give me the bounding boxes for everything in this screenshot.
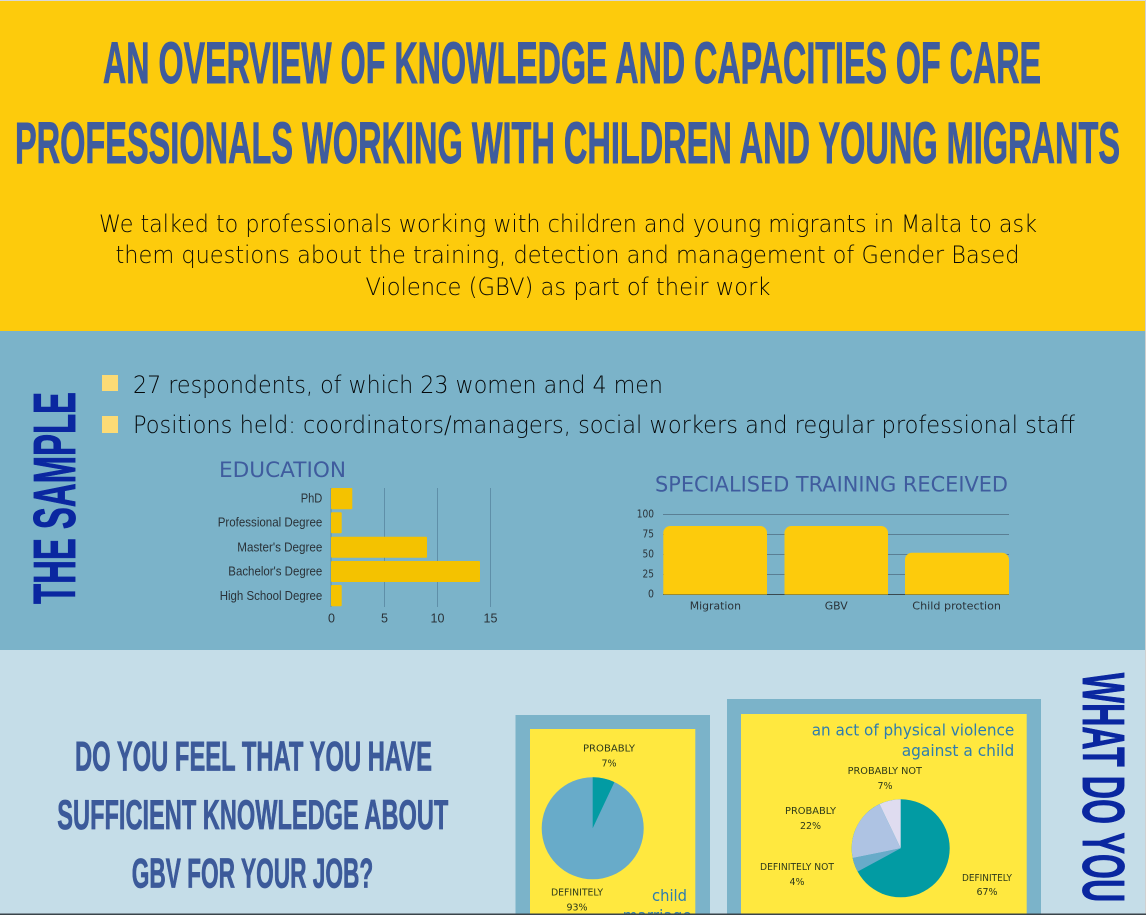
bar chart: education: PhD <box>301 492 322 506</box>
bar chart: specialised training: 100 <box>637 508 654 520</box>
bar chart: specialised training: 75 <box>642 528 654 540</box>
bar chart: specialised training: 50 <box>642 548 654 560</box>
panel: child marriage pie <box>516 715 710 915</box>
panel: physical violence pie: 22% <box>800 821 821 832</box>
bar chart: education: Professional Degree <box>218 516 322 530</box>
bar chart: education: 15 <box>484 612 497 626</box>
pie chart: physical violence <box>852 799 950 897</box>
question heading: DO YOU FEEL THAT YOU HAVE <box>75 733 432 780</box>
question heading <box>57 733 448 897</box>
bar chart: education: High School Degree <box>220 589 322 603</box>
bar chart: education: 0 <box>328 612 335 626</box>
panel: physical violence pie: PROBABLY NOT <box>848 766 922 777</box>
chart title: education: EDUCATION <box>219 458 346 482</box>
heading: the sample: THE SAMPLE <box>22 392 88 604</box>
bar chart: education: Master's Degree <box>237 541 322 555</box>
panel: physical violence pie: 67% <box>976 887 998 898</box>
bar chart: specialised training: 0 <box>648 588 654 600</box>
panel: child marriage pie: 7% <box>601 759 617 770</box>
panel: the sample <box>0 331 1146 650</box>
bullet list <box>102 371 1075 439</box>
pie caption: child marriage <box>623 886 692 915</box>
panel: physical violence pie: PROBABLY <box>785 806 836 817</box>
panel: physical violence pie: 4% <box>789 877 805 888</box>
bar chart: education <box>218 458 497 626</box>
panel: child marriage pie: 93% <box>566 903 588 914</box>
bullet list: 27 respondents, of which 23 women and 4 men <box>133 371 663 399</box>
bar chart: specialised training: Migration <box>690 600 741 612</box>
panel: physical violence pie: DEFINITELY <box>962 873 1012 884</box>
bar chart: education: Bachelor's Degree <box>228 565 322 579</box>
bullet list: Positions held: coordinators/managers, social workers and regular professional staff <box>133 411 1075 439</box>
panel: child marriage pie: PROBABLY <box>583 744 635 755</box>
panel: physical violence pie <box>727 699 1041 915</box>
pie caption: physical violence: against a child <box>902 741 1014 760</box>
panel: physical violence pie: 7% <box>877 781 893 792</box>
title <box>15 31 1120 176</box>
pie caption: child marriage: child <box>652 886 687 905</box>
question heading: SUFFICIENT KNOWLEDGE ABOUT <box>57 791 448 838</box>
intro text <box>99 210 1037 301</box>
intro text: them questions about the training, detection and management of Gender Based <box>116 241 1020 269</box>
panel: physical violence pie: DEFINITELY NOT <box>760 862 834 873</box>
bar chart: specialised training: 25 <box>642 568 654 580</box>
panel: what do you <box>0 650 1146 915</box>
bar chart: education: 10 <box>431 612 444 626</box>
pie caption: physical violence <box>812 721 1014 760</box>
bar chart: specialised training: GBV <box>825 600 848 612</box>
panel: header <box>0 0 1146 331</box>
bar chart: specialised training: Child protection <box>912 600 1001 612</box>
pie caption: physical violence: an act of physical violence <box>812 721 1014 740</box>
intro text: Violence (GBV) as part of their work <box>366 273 771 301</box>
panel: child marriage pie: DEFINITELY <box>551 888 603 899</box>
pie chart: child marriage <box>542 777 644 879</box>
bar chart: education: 5 <box>381 612 388 626</box>
chart title: specialised training: SPECIALISED TRAINING RECEIVED <box>655 473 1008 497</box>
bar chart: specialised training <box>637 473 1009 612</box>
question heading: GBV FOR YOUR JOB? <box>132 850 373 897</box>
intro text: We talked to professionals working with children and young migrants in Malta to ask <box>99 210 1037 238</box>
